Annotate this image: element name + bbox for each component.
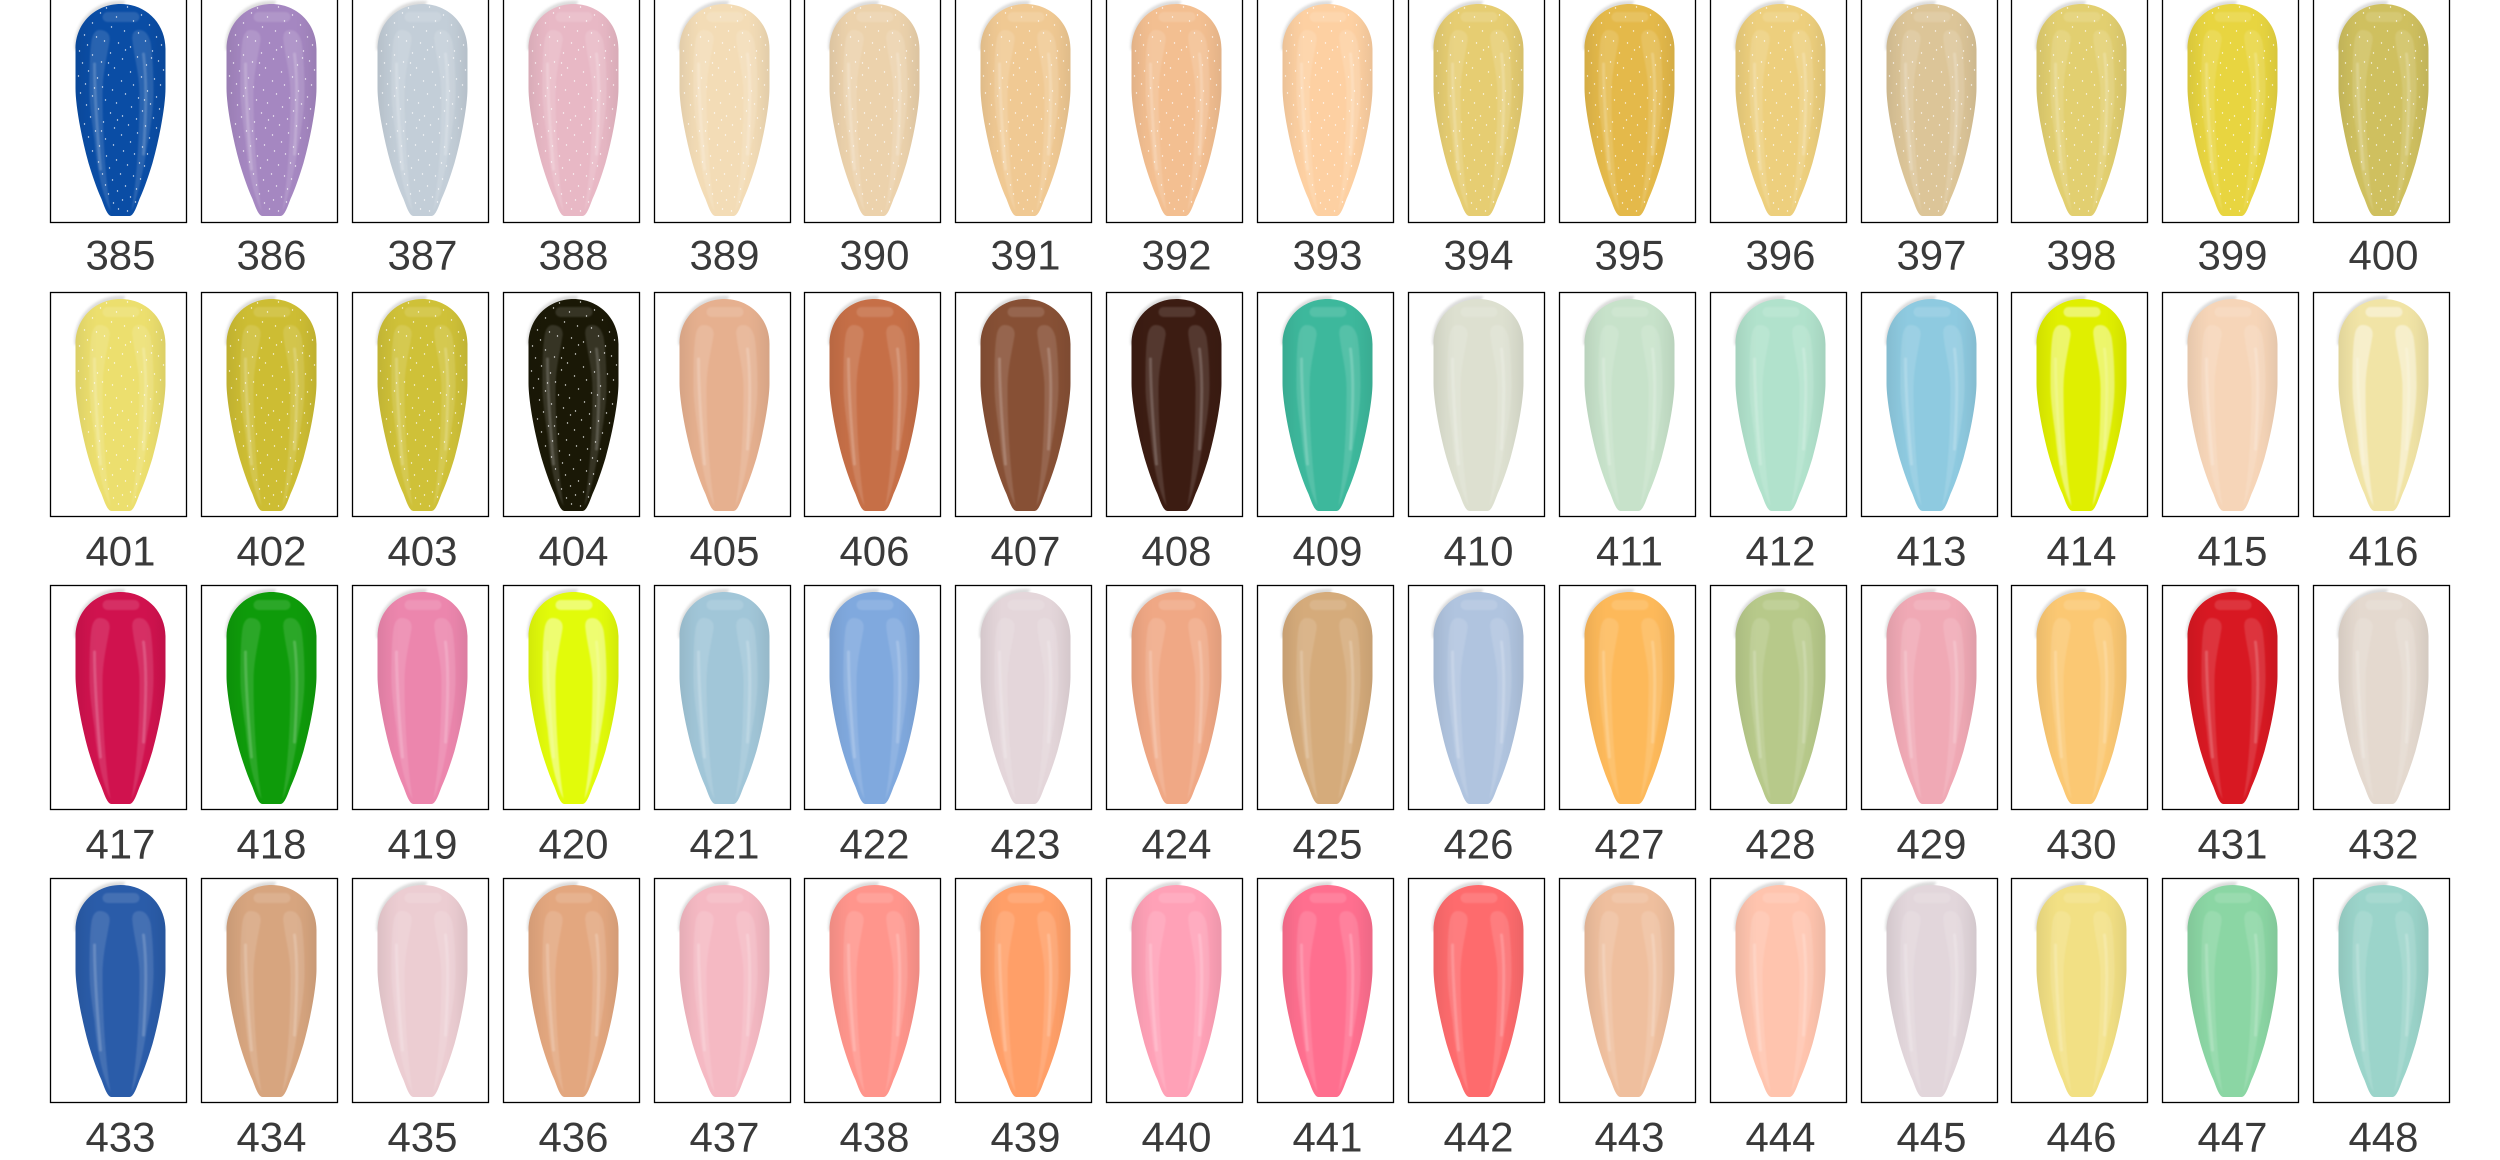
swatch 425 bbox=[1258, 586, 1394, 868]
nail 408 bbox=[1130, 296, 1222, 511]
swatch 406 bbox=[804, 292, 940, 574]
number 427: 427 bbox=[1594, 820, 1665, 868]
number 437: 437 bbox=[689, 1114, 760, 1160]
number 424: 424 bbox=[1141, 820, 1212, 868]
number 421: 421 bbox=[689, 820, 760, 868]
swatch 433 bbox=[50, 878, 186, 1160]
swatch 412 bbox=[1710, 292, 1846, 574]
number 397: 397 bbox=[1896, 232, 1967, 278]
nail 393 bbox=[1281, 1, 1372, 216]
number 423: 423 bbox=[990, 820, 1061, 868]
swatch 420 bbox=[504, 586, 640, 868]
number 398: 398 bbox=[2046, 232, 2117, 278]
nail 445 bbox=[1885, 882, 1976, 1097]
nail 437 bbox=[678, 882, 770, 1097]
swatch 439 bbox=[956, 878, 1092, 1160]
swatch 419 bbox=[352, 586, 488, 868]
nail 425 bbox=[1281, 589, 1372, 804]
number 414: 414 bbox=[2046, 528, 2117, 574]
number 405: 405 bbox=[689, 528, 760, 574]
nail 420 bbox=[527, 589, 618, 804]
nail 447 bbox=[2186, 882, 2278, 1097]
swatch 389 bbox=[654, 0, 790, 278]
nail 401 bbox=[74, 296, 166, 511]
swatch 428 bbox=[1710, 586, 1846, 868]
swatch 415 bbox=[2162, 292, 2298, 574]
number 440: 440 bbox=[1141, 1114, 1212, 1160]
number 409: 409 bbox=[1292, 528, 1363, 574]
swatch 435 bbox=[352, 878, 488, 1160]
swatch 405 bbox=[654, 292, 790, 574]
nail 448 bbox=[2337, 882, 2428, 1097]
swatch 432 bbox=[2314, 586, 2450, 868]
nail 434 bbox=[225, 882, 316, 1097]
number 445: 445 bbox=[1896, 1114, 1967, 1160]
number 439: 439 bbox=[990, 1114, 1061, 1160]
nail 439 bbox=[979, 882, 1070, 1097]
swatch 429 bbox=[1862, 586, 1998, 868]
nail 426 bbox=[1432, 589, 1524, 804]
number 416: 416 bbox=[2348, 528, 2419, 574]
number 446: 446 bbox=[2046, 1114, 2117, 1160]
nail 386 bbox=[225, 1, 316, 216]
number 394: 394 bbox=[1443, 232, 1514, 278]
swatch 401 bbox=[50, 292, 186, 574]
swatch 431 bbox=[2162, 586, 2298, 868]
number 393: 393 bbox=[1292, 232, 1363, 278]
nail 435 bbox=[376, 882, 468, 1097]
swatch 390 bbox=[804, 0, 940, 278]
nail 415 bbox=[2186, 296, 2278, 511]
nail 421 bbox=[678, 589, 770, 804]
nail 417 bbox=[74, 589, 166, 804]
nail 403 bbox=[376, 296, 468, 511]
number 391: 391 bbox=[990, 232, 1061, 278]
number 411: 411 bbox=[1596, 528, 1663, 574]
nail 388 bbox=[527, 1, 618, 216]
swatch 442 bbox=[1408, 878, 1544, 1160]
nail 431 bbox=[2186, 589, 2278, 804]
swatch 403 bbox=[352, 292, 488, 574]
swatch 430 bbox=[2012, 586, 2148, 868]
swatch 388 bbox=[504, 0, 640, 278]
swatch 411 bbox=[1560, 292, 1696, 574]
nail 441 bbox=[1281, 882, 1372, 1097]
nail 443 bbox=[1583, 882, 1674, 1097]
number 420: 420 bbox=[538, 820, 609, 868]
number 403: 403 bbox=[387, 528, 458, 574]
nail 409 bbox=[1281, 296, 1372, 511]
number 447: 447 bbox=[2197, 1114, 2268, 1160]
swatch 436 bbox=[504, 878, 640, 1160]
nail 392 bbox=[1130, 1, 1222, 216]
swatch 438 bbox=[804, 878, 940, 1160]
number 428: 428 bbox=[1745, 820, 1816, 868]
number 435: 435 bbox=[387, 1114, 458, 1160]
nail 389 bbox=[678, 1, 770, 216]
nail 390 bbox=[828, 1, 920, 216]
number 406: 406 bbox=[839, 528, 910, 574]
swatch 444 bbox=[1710, 878, 1846, 1160]
number 422: 422 bbox=[839, 820, 910, 868]
swatch 407 bbox=[956, 292, 1092, 574]
number 431: 431 bbox=[2197, 820, 2268, 868]
row 3: swatches 417-432 bbox=[50, 586, 2450, 868]
number 402: 402 bbox=[236, 528, 307, 574]
swatch 402 bbox=[202, 292, 338, 574]
number 389: 389 bbox=[689, 232, 760, 278]
nail 406 bbox=[828, 296, 920, 511]
nail 442 bbox=[1432, 882, 1524, 1097]
nail 438 bbox=[828, 882, 920, 1097]
swatch 414 bbox=[2012, 292, 2148, 574]
nail 396 bbox=[1734, 1, 1826, 216]
swatch 416 bbox=[2314, 292, 2450, 574]
swatch 422 bbox=[804, 586, 940, 868]
number 412: 412 bbox=[1745, 528, 1816, 574]
number 442: 442 bbox=[1443, 1114, 1514, 1160]
number 441: 441 bbox=[1292, 1114, 1363, 1160]
nail 433 bbox=[74, 882, 166, 1097]
row 1: swatches 385-400 bbox=[50, 0, 2450, 278]
nail 440 bbox=[1130, 882, 1222, 1097]
swatch 423 bbox=[956, 586, 1092, 868]
number 413: 413 bbox=[1896, 528, 1967, 574]
swatch 398 bbox=[2012, 0, 2148, 278]
number 408: 408 bbox=[1141, 528, 1212, 574]
nail 385 bbox=[74, 1, 166, 216]
swatch 395 bbox=[1560, 0, 1696, 278]
nail 394 bbox=[1432, 1, 1524, 216]
number 448: 448 bbox=[2348, 1114, 2419, 1160]
swatch 394 bbox=[1408, 0, 1544, 278]
nail 446 bbox=[2035, 882, 2126, 1097]
number 386: 386 bbox=[236, 232, 307, 278]
nail 430 bbox=[2035, 589, 2126, 804]
number 410: 410 bbox=[1443, 528, 1514, 574]
swatch 434 bbox=[202, 878, 338, 1160]
swatch 447 bbox=[2162, 878, 2298, 1160]
row 4: swatches 433-448 bbox=[50, 878, 2450, 1160]
nail 419 bbox=[376, 589, 468, 804]
number 392: 392 bbox=[1141, 232, 1212, 278]
nail 428 bbox=[1734, 589, 1826, 804]
nail 423 bbox=[979, 589, 1070, 804]
number 390: 390 bbox=[839, 232, 910, 278]
number 385: 385 bbox=[85, 232, 156, 278]
nail 399 bbox=[2186, 1, 2278, 216]
number 418: 418 bbox=[236, 820, 307, 868]
swatch 446 bbox=[2012, 878, 2148, 1160]
nail 413 bbox=[1885, 296, 1976, 511]
nail 398 bbox=[2035, 1, 2126, 216]
swatch 409 bbox=[1258, 292, 1394, 574]
number 443: 443 bbox=[1594, 1114, 1665, 1160]
swatch 418 bbox=[202, 586, 338, 868]
number 401: 401 bbox=[85, 528, 156, 574]
number 388: 388 bbox=[538, 232, 609, 278]
nail 400 bbox=[2337, 1, 2428, 216]
nail 391 bbox=[979, 1, 1070, 216]
swatch 386 bbox=[202, 0, 338, 278]
number 417: 417 bbox=[85, 820, 156, 868]
number 396: 396 bbox=[1745, 232, 1816, 278]
swatch 404 bbox=[504, 292, 640, 574]
nail 410 bbox=[1432, 296, 1524, 511]
swatch 387 bbox=[352, 0, 488, 278]
swatch 443 bbox=[1560, 878, 1696, 1160]
number 438: 438 bbox=[839, 1114, 910, 1160]
swatch 410 bbox=[1408, 292, 1544, 574]
swatch 417 bbox=[50, 586, 186, 868]
swatch 399 bbox=[2162, 0, 2298, 278]
number 434: 434 bbox=[236, 1114, 307, 1160]
number 425: 425 bbox=[1292, 820, 1363, 868]
swatch 413 bbox=[1862, 292, 1998, 574]
swatch 421 bbox=[654, 586, 790, 868]
swatch 396 bbox=[1710, 0, 1846, 278]
nail 397 bbox=[1885, 1, 1976, 216]
nail 436 bbox=[527, 882, 618, 1097]
number 399: 399 bbox=[2197, 232, 2268, 278]
swatch 440 bbox=[1106, 878, 1242, 1160]
number 395: 395 bbox=[1594, 232, 1665, 278]
swatch 448 bbox=[2314, 878, 2450, 1160]
number 404: 404 bbox=[538, 528, 609, 574]
swatch 426 bbox=[1408, 586, 1544, 868]
nail 402 bbox=[225, 296, 316, 511]
nail 405 bbox=[678, 296, 770, 511]
swatch 393 bbox=[1258, 0, 1394, 278]
number 400: 400 bbox=[2348, 232, 2419, 278]
swatch 391 bbox=[956, 0, 1092, 278]
number 433: 433 bbox=[85, 1114, 156, 1160]
nail 432 bbox=[2337, 589, 2428, 804]
swatch 424 bbox=[1106, 586, 1242, 868]
number 419: 419 bbox=[387, 820, 458, 868]
number 426: 426 bbox=[1443, 820, 1514, 868]
nail 414 bbox=[2035, 296, 2126, 511]
number 444: 444 bbox=[1745, 1114, 1816, 1160]
swatch 427 bbox=[1560, 586, 1696, 868]
nail 444 bbox=[1734, 882, 1826, 1097]
swatch 437 bbox=[654, 878, 790, 1160]
number 432: 432 bbox=[2348, 820, 2419, 868]
nail 429 bbox=[1885, 589, 1976, 804]
nail 427 bbox=[1583, 589, 1674, 804]
swatch 408 bbox=[1106, 292, 1242, 574]
nail 416 bbox=[2337, 296, 2428, 511]
nail 395 bbox=[1583, 1, 1674, 216]
swatch 392 bbox=[1106, 0, 1242, 278]
row 2: swatches 401-416 bbox=[50, 292, 2450, 574]
number 436: 436 bbox=[538, 1114, 609, 1160]
number 387: 387 bbox=[387, 232, 458, 278]
number 430: 430 bbox=[2046, 820, 2117, 868]
nail 387 bbox=[376, 1, 468, 216]
nail 407 bbox=[979, 296, 1070, 511]
nail 424 bbox=[1130, 589, 1222, 804]
swatch 397 bbox=[1862, 0, 1998, 278]
number 415: 415 bbox=[2197, 528, 2268, 574]
nail 422 bbox=[828, 589, 920, 804]
swatch 441 bbox=[1258, 878, 1394, 1160]
number 429: 429 bbox=[1896, 820, 1967, 868]
swatch 400 bbox=[2314, 0, 2450, 278]
swatch 385 bbox=[50, 0, 186, 278]
nail 418 bbox=[225, 589, 316, 804]
number 407: 407 bbox=[990, 528, 1061, 574]
swatch 445 bbox=[1862, 878, 1998, 1160]
nail 412 bbox=[1734, 296, 1826, 511]
nail 404 bbox=[527, 296, 618, 511]
nail 411 bbox=[1583, 296, 1674, 511]
